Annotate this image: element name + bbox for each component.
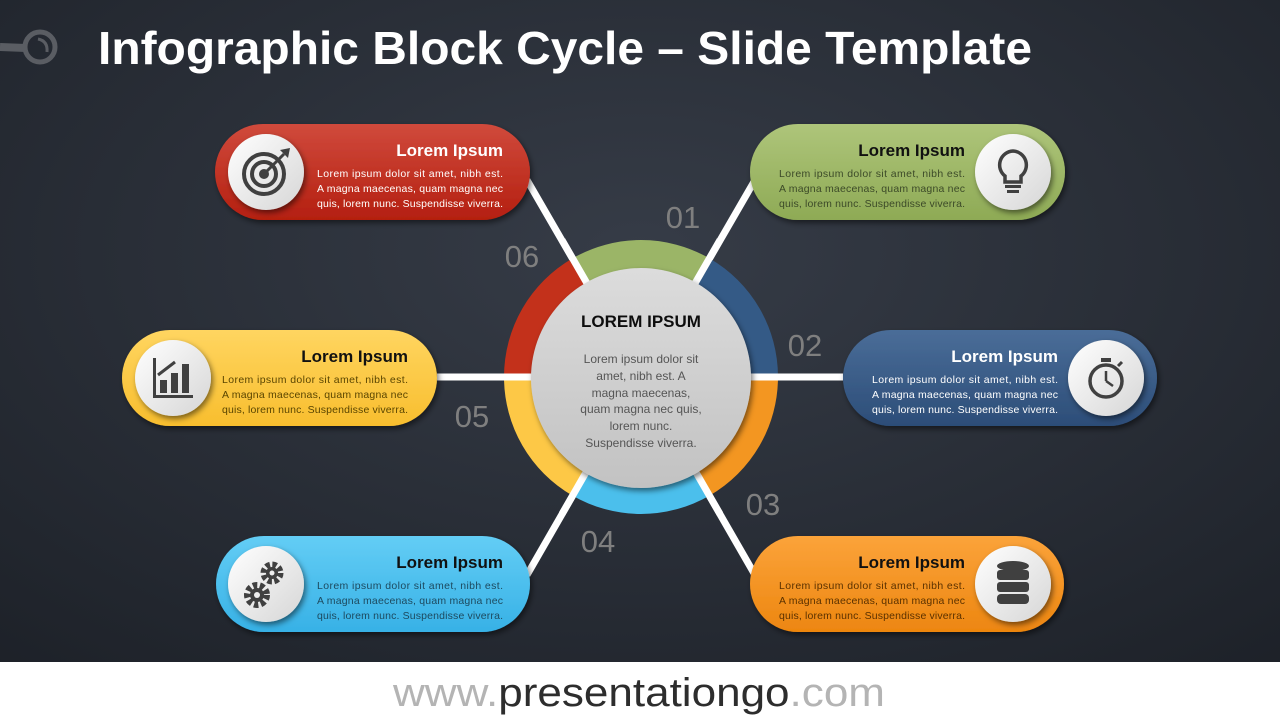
pill 02 blue bbox=[843, 330, 1157, 426]
pill 01 green: Lorem Ipsum bbox=[858, 141, 965, 160]
pill 04 light blue bbox=[216, 536, 530, 632]
pill 05 yellow: quis, lorem nunc. Suspendisse viverra. bbox=[222, 404, 408, 416]
center circle: quam magna nec quis, bbox=[580, 402, 702, 416]
pill 06 red: Lorem ipsum dolor sit amet, nibh est. bbox=[317, 168, 503, 180]
pill 03 orange: quis, lorem nunc. Suspendisse viverra. bbox=[779, 610, 965, 622]
pill 01 green: quis, lorem nunc. Suspendisse viverra. bbox=[779, 198, 965, 210]
numbers: 01 bbox=[666, 200, 700, 235]
title: Infographic Block Cycle – Slide Template bbox=[98, 22, 1032, 74]
numbers: 02 bbox=[788, 328, 822, 363]
pill 05 yellow: A magna maecenas, quam magna nec bbox=[222, 389, 408, 401]
center circle: Suspendisse viverra. bbox=[585, 436, 697, 450]
pill 02 blue: A magna maecenas, quam magna nec bbox=[872, 389, 1058, 401]
pill 05 yellow: Lorem ipsum dolor sit amet, nibh est. bbox=[222, 374, 408, 386]
pill 03 orange: A magna maecenas, quam magna nec bbox=[779, 595, 965, 607]
numbers: 04 bbox=[581, 524, 615, 559]
spoke overlays bbox=[492, 240, 790, 514]
spokes bbox=[437, 180, 843, 575]
pill 04 light blue: Lorem Ipsum bbox=[396, 553, 503, 572]
footer: www.presentationgo .com bbox=[392, 671, 885, 715]
center circle bbox=[531, 268, 751, 488]
pill 04 light blue: Lorem ipsum dolor sit amet, nibh est. bbox=[317, 580, 503, 592]
pill 06 red: A magna maecenas, quam magna nec bbox=[317, 183, 503, 195]
pill 04 light blue: A magna maecenas, quam magna nec bbox=[317, 595, 503, 607]
numbers: 03 bbox=[746, 487, 780, 522]
pill 01 green bbox=[750, 124, 1065, 220]
pill 04 light blue: quis, lorem nunc. Suspendisse viverra. bbox=[317, 610, 503, 622]
pill 05 yellow bbox=[122, 330, 437, 426]
pill 05 yellow: Lorem Ipsum bbox=[301, 347, 408, 366]
pill 01 green: Lorem ipsum dolor sit amet, nibh est. bbox=[779, 168, 965, 180]
numbers: 05 bbox=[455, 399, 489, 434]
pill 03 orange bbox=[750, 536, 1064, 632]
pill 06 red bbox=[215, 124, 530, 220]
footer bbox=[0, 662, 1280, 720]
center circle: amet, nibh est. A bbox=[596, 369, 686, 383]
pill 06 red: Lorem Ipsum bbox=[396, 141, 503, 160]
pill 03 orange: Lorem Ipsum bbox=[858, 553, 965, 572]
center circle: magna maecenas, bbox=[592, 386, 690, 400]
numbers: 06 bbox=[505, 239, 539, 274]
logo icon bbox=[0, 32, 55, 62]
pill 02 blue: Lorem ipsum dolor sit amet, nibh est. bbox=[872, 374, 1058, 386]
center circle: Lorem ipsum dolor sit bbox=[584, 352, 699, 366]
numbers bbox=[455, 200, 822, 559]
pill 06 red: quis, lorem nunc. Suspendisse viverra. bbox=[317, 198, 503, 210]
pill 02 blue: quis, lorem nunc. Suspendisse viverra. bbox=[872, 404, 1058, 416]
pill 03 orange: Lorem ipsum dolor sit amet, nibh est. bbox=[779, 580, 965, 592]
center circle: LOREM IPSUM bbox=[581, 312, 701, 331]
center circle: lorem nunc. bbox=[610, 419, 672, 433]
pill 01 green: A magna maecenas, quam magna nec bbox=[779, 183, 965, 195]
ring segments bbox=[504, 240, 778, 514]
pill 02 blue: Lorem Ipsum bbox=[951, 347, 1058, 366]
